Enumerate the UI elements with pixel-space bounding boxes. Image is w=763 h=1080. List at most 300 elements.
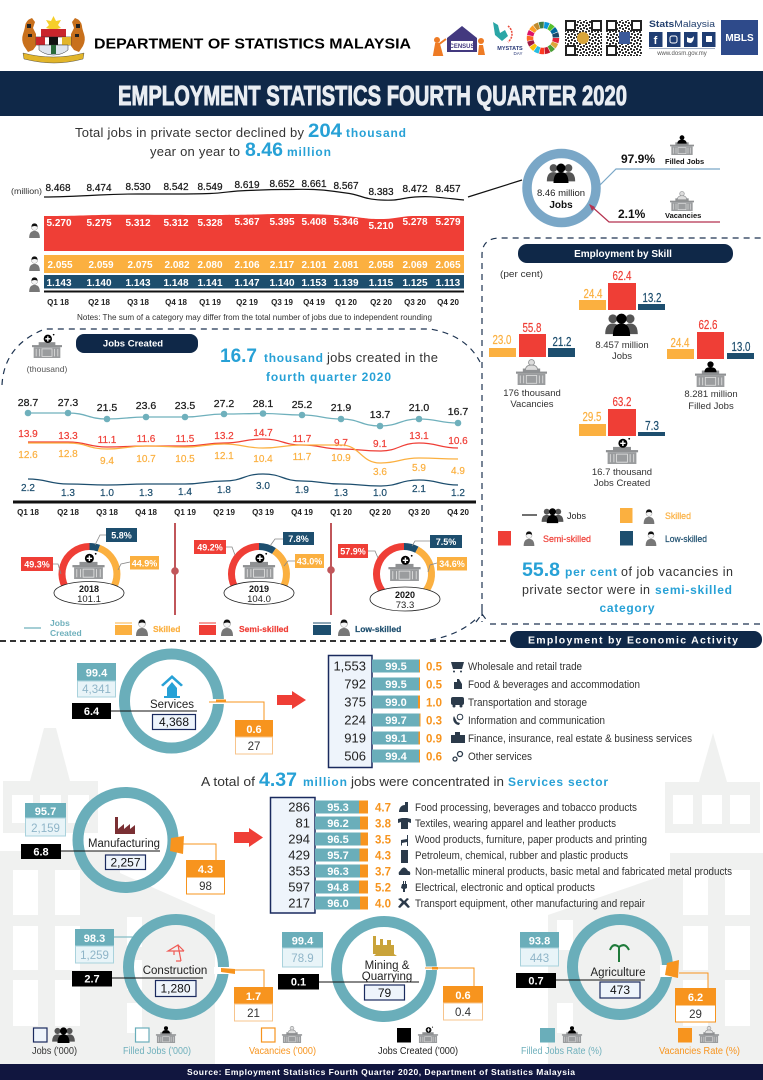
jobs total: 4,368 xyxy=(159,715,189,729)
filled jobs callout: 98.3 xyxy=(84,933,105,945)
low-skilled band: 1.125 xyxy=(402,278,428,289)
census logo xyxy=(434,26,485,55)
services row labels: Finance, insurance, real estate & business services xyxy=(468,733,692,745)
donut: 8.46 million jobs: 97.9% xyxy=(621,152,655,166)
line chart: jobs created total xyxy=(18,397,468,429)
manufacturing breakdown table: 96.3 xyxy=(327,866,349,878)
donut: 8.46 million jobs: Filled Jobs xyxy=(665,157,704,166)
low-skilled band: 1.140 xyxy=(269,278,295,289)
economic activity legend: Filled Jobs ('000) xyxy=(123,1046,191,1057)
vacancies callout: 6.2 xyxy=(688,992,703,1004)
jobs created callout: 0.1 xyxy=(291,976,306,988)
skill bars: vacancies: 176 thousand xyxy=(503,388,561,399)
skill legend: Jobs xyxy=(567,511,586,521)
headline: total jobs: million xyxy=(287,145,331,159)
skill bars: jobs xyxy=(579,269,665,362)
low-skilled band: 1.141 xyxy=(197,278,223,289)
line chart: low-skilled: 1.3 xyxy=(334,488,348,499)
line chart: semi-skilled: 13.2 xyxy=(214,431,234,442)
skilled band: 2.058 xyxy=(368,260,394,271)
donut: 8.46 million jobs: Jobs xyxy=(549,200,573,211)
semi-skilled band: 5.270 xyxy=(46,218,72,229)
low-skilled band: 1.153 xyxy=(301,278,327,289)
total jobs line and values: 8.383 xyxy=(368,187,394,198)
skilled band: 2.069 xyxy=(402,260,428,271)
manufacturing breakdown table: 81 xyxy=(296,816,310,830)
manufacturing row labels: Food processing, beverages and tobacco products xyxy=(415,802,637,814)
jobs created axis labels xyxy=(17,508,469,517)
skill bars: filled jobs: 24.4 xyxy=(670,336,690,350)
services row labels: Transportation and storage xyxy=(468,697,587,709)
skilled band: 2.065 xyxy=(435,260,461,271)
skill takeaway text xyxy=(522,560,733,615)
jobs created callout: 2.7 xyxy=(84,974,100,986)
economic activity legend: Jobs Created ('000) xyxy=(378,1046,458,1057)
line chart: skilled xyxy=(18,443,465,478)
services row labels: Food & beverages and accommodation xyxy=(468,679,640,691)
donut: 8.46 million jobs xyxy=(468,135,720,222)
services row labels xyxy=(468,661,692,763)
manufacturing breakdown table: 4.3 xyxy=(375,850,391,862)
manufacturing row labels: Petroleum, chemical, rubber and plastic products xyxy=(415,850,628,862)
semi-skilled band: 5.210 xyxy=(368,221,394,232)
manufacturing breakdown table: 95.3 xyxy=(327,802,349,814)
semi-skilled band xyxy=(44,214,464,251)
quarter axis labels: Q2 18 xyxy=(88,298,110,307)
line chart: skilled: 10.7 xyxy=(136,454,156,465)
donut 2019: 2019 xyxy=(249,584,269,594)
agriculture sector ring xyxy=(516,920,716,1022)
manufacturing row labels: Electrical, electronic and optical products xyxy=(415,882,595,894)
jobs created headline: 16.7 xyxy=(220,346,257,367)
economic activity legend: Vacancies ('000) xyxy=(249,1046,316,1057)
total jobs line and values: 8.468 xyxy=(45,183,71,194)
icon: mining rig xyxy=(373,936,397,956)
jobs created headline: fourth quarter 2020 xyxy=(266,370,391,384)
services breakdown table: 99.7 xyxy=(385,715,407,727)
filled jobs callout xyxy=(282,932,323,967)
filled jobs callout xyxy=(25,803,66,836)
services breakdown table: 0.5 xyxy=(426,662,443,674)
line chart: semi-skilled: 11.5 xyxy=(176,434,195,445)
manufacturing breakdown table: 597 xyxy=(288,880,310,894)
donut 2020: 57.9% xyxy=(340,546,366,556)
services breakdown table: 0.9 xyxy=(426,734,442,746)
services breakdown table: 224 xyxy=(344,712,366,728)
line chart: semi-skilled: 9.1 xyxy=(373,439,387,450)
services takeaway text: 4.37 xyxy=(259,770,297,791)
total jobs line and values: 8.472 xyxy=(402,184,428,195)
quarter axis labels: Q4 20 xyxy=(437,298,459,307)
low-skilled band xyxy=(44,275,464,289)
skilled band: 2.082 xyxy=(164,260,190,271)
panel: jobs created xyxy=(0,329,510,641)
low-skilled band: 1.113 xyxy=(436,278,461,289)
total jobs line and values: 8.457 xyxy=(435,184,461,195)
line chart: low-skilled: 3.0 xyxy=(256,481,270,492)
skill bars: vacancies: 23.0 xyxy=(492,333,512,347)
filled jobs callout: 78.9 xyxy=(291,953,314,965)
icon: factory xyxy=(115,817,135,834)
semi-skilled band: 5.275 xyxy=(86,218,112,229)
year dividers xyxy=(172,523,334,615)
services breakdown table: 1,553 xyxy=(333,658,366,674)
donut 2019 xyxy=(194,532,324,605)
manufacturing row labels: Transport equipment, other manufacturing and repair xyxy=(415,898,645,910)
manufacturing breakdown table: 217 xyxy=(288,896,310,910)
skill bars: jobs: 13.2 xyxy=(642,291,662,305)
filled jobs callout: 99.4 xyxy=(86,668,108,680)
economic activity legend: Vacancies Rate (%) xyxy=(659,1046,740,1057)
services sector ring: Services xyxy=(150,699,194,711)
line chart: semi-skilled: 9.7 xyxy=(334,438,348,449)
low-skilled band: 1.147 xyxy=(234,278,260,289)
skill takeaway text: per cent xyxy=(565,565,617,579)
jobs created axis labels: Q3 19 xyxy=(252,508,274,517)
services row icons xyxy=(451,662,465,761)
skill bars: filled jobs: 62.6 xyxy=(698,318,718,332)
mining and quarrying sector ring: Quarrying xyxy=(362,971,412,983)
line chart: skilled: 9.4 xyxy=(100,456,114,467)
line chart: low-skilled: 1.8 xyxy=(217,485,231,496)
skill bars: vacancies: 21.2 xyxy=(552,335,572,349)
total jobs line and values: 8.549 xyxy=(197,182,223,193)
chart note: Notes: The sum of a category may differ from the total number of jobs due to independent rounding xyxy=(77,313,432,322)
services breakdown table: 0.3 xyxy=(426,716,442,728)
donut 2018 xyxy=(21,528,159,605)
line chart: jobs created total: 21.0 xyxy=(409,402,429,414)
line chart: low-skilled xyxy=(21,474,465,499)
line chart: low-skilled: 1.0 xyxy=(373,488,387,499)
manufacturing sector ring: Manufacturing xyxy=(88,838,160,850)
skill legend: Semi-skilled xyxy=(543,534,591,544)
jobs created axis labels: Q2 20 xyxy=(369,508,391,517)
census logo: CENSUS xyxy=(449,44,475,50)
donut 2020: 7.5% xyxy=(436,537,456,547)
line chart: semi-skilled: 11.7 xyxy=(293,434,312,445)
department name: DEPARTMENT OF STATISTICS MALAYSIA xyxy=(94,36,412,52)
economic activity legend xyxy=(32,1026,740,1057)
jobs created legend: Skilled xyxy=(153,624,180,634)
source footer: Source: Employment Statistics Fourth Quarter 2020, Department of Statistics Malaysia xyxy=(187,1067,575,1077)
line chart: skilled: 3.6 xyxy=(373,467,387,478)
semi-skilled band: 5.312 xyxy=(125,218,151,229)
donut 2019: 49.2% xyxy=(197,542,223,552)
services row labels: Information and communication xyxy=(468,715,605,727)
semi-skilled band: 5.279 xyxy=(435,217,461,228)
jobs total xyxy=(364,985,404,1000)
vacancies callout: 21 xyxy=(247,1008,260,1020)
line chart: skilled: 10.4 xyxy=(253,454,273,465)
quarter axis labels: Q4 18 xyxy=(165,298,187,307)
donut 2020: 73.3 xyxy=(396,600,414,611)
services breakdown table: 99.0 xyxy=(385,697,407,709)
headline: total jobs: Total jobs in private sector declined by xyxy=(75,125,304,140)
jobs created axis labels: Q2 19 xyxy=(213,508,235,517)
jobs created axis labels: Q1 18 xyxy=(17,508,39,517)
jobs created headline xyxy=(220,346,438,384)
filled jobs callout: 443 xyxy=(530,953,549,965)
skill bars: jobs created: 7.3 xyxy=(645,419,659,433)
skilled band: 2.059 xyxy=(88,260,114,271)
jobs created legend: Created xyxy=(50,628,82,638)
line chart: low-skilled: 1.2 xyxy=(451,488,465,499)
vacancies callout xyxy=(235,720,273,754)
donut 2020: 34.6% xyxy=(439,559,465,569)
total jobs line and values: 8.474 xyxy=(86,183,112,194)
manufacturing breakdown table: 4.7 xyxy=(375,802,391,814)
jobs created legend: Low-skilled xyxy=(355,624,401,634)
jobs total xyxy=(600,982,640,998)
jobs created axis labels: Q2 18 xyxy=(57,508,79,517)
vacancies callout xyxy=(234,987,273,1021)
donut 2018: 44.9% xyxy=(132,558,157,568)
skill bars: filled jobs: 8.281 million xyxy=(684,389,738,400)
low-skilled band: 1.115 xyxy=(369,278,394,289)
skill takeaway text: of job vacancies in xyxy=(621,565,733,579)
mbls logo: MBLS xyxy=(725,33,754,44)
jobs created icon xyxy=(32,334,62,358)
jobs created callout: 6.8 xyxy=(33,846,49,858)
total jobs line and values xyxy=(11,179,464,200)
services breakdown table: 0.6 xyxy=(426,752,442,764)
jobs created callout xyxy=(278,974,419,990)
skill bars: filled jobs: 13.0 xyxy=(732,340,751,354)
headline: total jobs: 204 xyxy=(308,121,342,142)
skill takeaway text: semi-skilled xyxy=(655,583,732,597)
line chart: low-skilled: 1.3 xyxy=(139,488,153,499)
jobs created legend: Semi-skilled xyxy=(239,624,289,634)
jobs created axis labels: Q1 20 xyxy=(330,508,352,517)
jobs created callout xyxy=(516,973,645,988)
filled jobs callout xyxy=(75,929,114,963)
skill bars: jobs: 62.4 xyxy=(612,269,632,283)
total jobs line and values: 8.567 xyxy=(333,181,359,192)
mbls logo xyxy=(721,20,758,55)
economic activity legend: Filled Jobs Rate (%) xyxy=(521,1046,602,1057)
filled jobs callout xyxy=(77,663,116,697)
line chart: jobs created total: 27.3 xyxy=(58,397,78,409)
line chart: low-skilled: 2.1 xyxy=(412,484,426,495)
manufacturing breakdown table: 3.5 xyxy=(375,834,392,846)
total jobs line and values: 8.652 xyxy=(269,179,295,190)
low-skilled band: 1.140 xyxy=(86,278,112,289)
skilled band: 2.080 xyxy=(197,260,223,271)
arrow: manufacturing to breakdown xyxy=(234,828,263,847)
line chart: skilled: 10.9 xyxy=(331,453,351,464)
line chart: semi-skilled: 13.3 xyxy=(58,431,78,442)
semi-skilled band: 5.408 xyxy=(301,217,327,228)
skilled band: 2.075 xyxy=(127,260,153,271)
semi-skilled band: 5.312 xyxy=(163,218,189,229)
vacancies callout: 4.3 xyxy=(198,864,213,876)
vacancies callout: 98 xyxy=(199,881,212,893)
qr code two xyxy=(606,20,642,56)
vacancies callout xyxy=(186,860,225,894)
total jobs line and values: 8.661 xyxy=(301,179,327,190)
vacancies callout: 0.4 xyxy=(455,1007,472,1019)
skilled band: 2.101 xyxy=(301,260,327,271)
services breakdown table: 99.1 xyxy=(385,733,407,745)
line chart: jobs created total: 21.5 xyxy=(97,402,117,414)
donut 2018: 49.3% xyxy=(24,560,50,570)
jobs created legend xyxy=(24,618,401,638)
quarter axis labels: Q3 19 xyxy=(271,298,293,307)
services breakdown table: 792 xyxy=(344,676,366,692)
line chart: jobs created total: 16.7 xyxy=(448,406,468,418)
filled jobs callout xyxy=(520,932,559,966)
services breakdown table: 0.5 xyxy=(426,680,443,692)
line chart: jobs created total: 23.5 xyxy=(175,400,195,412)
semi-skilled band: 5.367 xyxy=(234,217,260,228)
line chart: jobs created total: 28.1 xyxy=(253,398,273,410)
line chart: skilled: 5.9 xyxy=(412,463,426,474)
manufacturing row icons xyxy=(398,802,411,908)
jobs total xyxy=(156,980,196,996)
skill bars: jobs: 8.457 million xyxy=(595,340,649,351)
statsmalaysia social block xyxy=(649,19,716,57)
headline: total jobs: 8.46 xyxy=(245,140,283,161)
title banner xyxy=(0,71,763,116)
total jobs line and values: 8.619 xyxy=(234,180,260,191)
line chart: low-skilled: 2.2 xyxy=(21,483,35,494)
services breakdown table: 506 xyxy=(344,748,366,764)
donut 2018: 5.8% xyxy=(111,530,132,540)
skill bars: vacancies: Vacancies xyxy=(510,399,554,410)
jobs created headline: thousand xyxy=(264,351,323,365)
line chart: semi-skilled: 11.6 xyxy=(137,434,156,445)
quarter axis labels: Q2 19 xyxy=(236,298,258,307)
jobs total: 1,280 xyxy=(160,982,191,996)
quarter axis labels: Q1 19 xyxy=(199,298,221,307)
line chart: semi-skilled: 14.7 xyxy=(253,428,273,439)
filled jobs callout: 95.7 xyxy=(35,806,56,818)
national crest logo xyxy=(22,16,85,63)
skill heading: Employment by Skill xyxy=(574,249,672,260)
skill bars: filled jobs: Filled Jobs xyxy=(688,401,734,412)
skill bars: jobs created: Jobs Created xyxy=(594,478,650,489)
statsmalaysia social block: f xyxy=(654,35,658,47)
services breakdown table xyxy=(328,656,692,768)
manufacturing breakdown table: 3.7 xyxy=(375,866,391,878)
skill bars: jobs created xyxy=(579,395,665,489)
filled jobs callout: 2,159 xyxy=(31,823,60,835)
jobs created callout xyxy=(72,703,197,719)
donut: 8.46 million jobs: 2.1% xyxy=(618,207,646,221)
line chart: skilled: 12.6 xyxy=(18,450,38,461)
mining and quarrying sector ring xyxy=(278,922,483,1020)
source footer xyxy=(0,1064,763,1080)
skilled band: 2.081 xyxy=(333,260,359,271)
vacancies callout xyxy=(443,986,483,1020)
filled jobs callout: 99.4 xyxy=(292,936,314,948)
statsmalaysia social block: www.dosm.gov.my xyxy=(656,51,707,57)
manufacturing breakdown table: 429 xyxy=(288,848,310,862)
low-skilled band: 1.143 xyxy=(46,278,72,289)
manufacturing breakdown table: 95.7 xyxy=(327,850,349,862)
construction sector ring xyxy=(72,920,273,1021)
vacancies callout: 1.7 xyxy=(246,991,261,1003)
services breakdown table: 99.5 xyxy=(385,661,407,673)
skill takeaway text: private sector were in xyxy=(522,583,650,597)
line chart: low-skilled: 1.0 xyxy=(100,488,114,499)
line chart: semi-skilled: 13.1 xyxy=(409,431,429,442)
jobs created axis labels: Q3 20 xyxy=(408,508,430,517)
vacancies callout: 0.6 xyxy=(246,724,262,736)
services breakdown table: 99.4 xyxy=(385,751,408,763)
skilled band: 2.117 xyxy=(270,260,295,271)
total jobs line and values: 8.530 xyxy=(125,182,151,193)
jobs total xyxy=(152,714,196,730)
manufacturing sector ring xyxy=(21,792,225,894)
donut 2020 xyxy=(338,535,467,611)
skill bars: jobs: 24.4 xyxy=(584,287,603,301)
icon: services xyxy=(161,675,183,698)
vacancies callout xyxy=(675,988,716,1022)
jobs created heading xyxy=(76,334,198,353)
services takeaway text: A total of xyxy=(201,774,255,789)
line chart: semi-skilled: 11.1 xyxy=(98,435,117,446)
stacked jobs chart xyxy=(11,179,464,307)
line chart: semi-skilled xyxy=(18,428,468,451)
manufacturing row labels xyxy=(415,802,732,910)
quarter axis labels: Q3 18 xyxy=(127,298,149,307)
services row labels: Other services xyxy=(468,751,532,763)
jobs created callout: 0.7 xyxy=(528,976,544,988)
agriculture sector ring: Agriculture xyxy=(591,967,645,979)
line chart: low-skilled: 1.4 xyxy=(178,487,192,498)
line chart: skilled: 11.7 xyxy=(293,452,312,463)
donut 2020: 2020 xyxy=(395,590,415,600)
headline: total jobs: thousand xyxy=(346,126,406,140)
skill bars: jobs created: 63.2 xyxy=(612,395,632,409)
icon: palm tree xyxy=(610,945,629,962)
services takeaway text: million xyxy=(303,775,347,789)
total jobs line and values: 8.542 xyxy=(163,182,189,193)
skilled band xyxy=(44,255,464,273)
skill heading xyxy=(518,244,733,263)
construction sector ring: Construction xyxy=(143,965,207,977)
line chart: semi-skilled: 10.6 xyxy=(448,436,468,447)
economic activity heading: Employment by Economic Activity xyxy=(528,634,738,646)
skill legend: Skilled xyxy=(665,511,691,521)
skill bars: vacancies xyxy=(489,321,575,410)
skill bars: jobs created: 16.7 thousand xyxy=(592,467,652,478)
jobs created callout xyxy=(21,844,160,859)
donut: 8.46 million jobs: 8.46 million xyxy=(537,188,585,199)
line chart: jobs created total: 13.7 xyxy=(370,409,390,421)
skilled band: 2.055 xyxy=(47,260,73,271)
sdg wheel logo xyxy=(525,20,561,56)
quarter axis labels: Q1 18 xyxy=(47,298,69,307)
jobs created axis labels: Q4 18 xyxy=(135,508,157,517)
arrow: services to breakdown xyxy=(277,691,306,709)
filled jobs callout: 93.8 xyxy=(529,936,550,948)
manufacturing row labels: Non-metallic mineral products, basic metal and fabricated metal products xyxy=(415,866,732,878)
manufacturing breakdown table: 96.2 xyxy=(327,818,349,830)
jobs created axis labels: Q4 19 xyxy=(291,508,313,517)
manufacturing breakdown table: 3.8 xyxy=(375,818,392,830)
line chart: jobs created total: 27.2 xyxy=(214,398,234,410)
low-skilled band: 1.139 xyxy=(333,278,359,289)
manufacturing breakdown table xyxy=(270,798,732,913)
line chart: skilled: 12.8 xyxy=(58,449,78,460)
donut 2019: 43.0% xyxy=(297,556,322,566)
semi-skilled band: 5.346 xyxy=(333,217,359,228)
manufacturing row labels: Wood products, furniture, paper products and printing xyxy=(415,834,647,846)
vacancies callout: 27 xyxy=(248,741,260,753)
vacancies callout: 0.6 xyxy=(455,990,471,1002)
